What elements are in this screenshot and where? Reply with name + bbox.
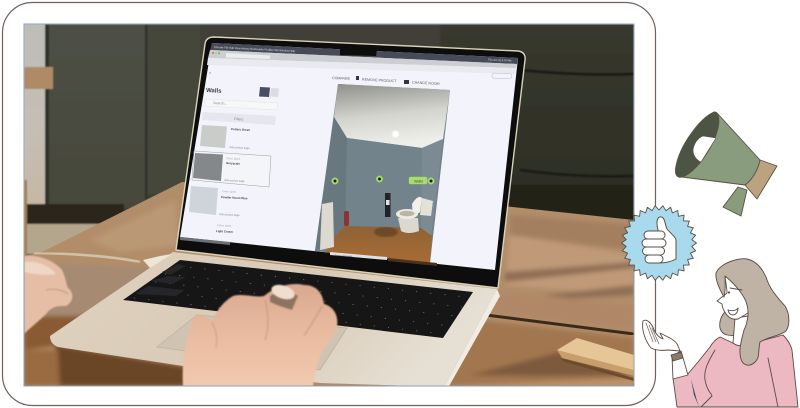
colour label: Colour Spark — [226, 157, 241, 161]
walls tag text: Walls — [414, 180, 423, 184]
mac menu bar — [210, 43, 518, 64]
selected card — [192, 151, 271, 187]
photo: person using laptop — [24, 24, 634, 388]
bottom strip pieces — [180, 237, 230, 245]
hotspot markers — [332, 176, 434, 184]
icon: thumbs-up badge — [622, 206, 696, 280]
thumb and palm — [657, 217, 676, 263]
laptop cable — [34, 253, 140, 262]
megaphone grip — [745, 160, 777, 199]
keyboard — [123, 260, 473, 338]
search box — [204, 99, 278, 110]
hair — [716, 259, 789, 365]
search text: Search... — [213, 101, 228, 106]
icon: megaphone — [675, 112, 777, 216]
toolbar icons — [356, 76, 409, 84]
close icon: × — [209, 70, 212, 75]
product name: Powder Room Blue — [221, 195, 248, 200]
camera notch — [340, 47, 377, 56]
shelf unit — [320, 202, 334, 250]
wood streaks — [24, 200, 634, 386]
walls heading: Walls — [206, 88, 222, 95]
badge starburst — [622, 206, 696, 280]
view toggle — [259, 87, 270, 97]
toolbar labels: COMPARE — [332, 76, 351, 81]
toilet — [396, 197, 433, 233]
laptop — [50, 37, 525, 388]
dark inner panel — [691, 379, 699, 407]
sweater — [673, 335, 798, 407]
laptop screen — [180, 43, 518, 270]
filters button — [202, 112, 276, 125]
watch band — [671, 352, 683, 361]
dispenser label — [386, 200, 390, 205]
floor — [326, 226, 432, 263]
mouth — [728, 308, 738, 315]
swatch: powder room blue — [189, 186, 218, 215]
colour label: Colour Spark — [222, 190, 237, 194]
trackpad — [157, 315, 347, 370]
megaphone opening — [675, 112, 719, 177]
colour label: Colour Spark — [217, 224, 232, 228]
megaphone lower handle — [723, 187, 747, 216]
megaphone inner — [693, 136, 716, 162]
brown dock bar — [388, 258, 437, 266]
browser tab strip — [208, 50, 517, 68]
right hand — [183, 282, 337, 388]
laptop base — [50, 252, 500, 388]
fire extinguisher — [344, 211, 349, 226]
photo border — [24, 24, 634, 386]
browser traffic lights — [212, 52, 220, 54]
remove product label: REMOVE PRODUCT — [362, 78, 397, 83]
ceiling — [334, 84, 450, 148]
brow — [730, 288, 742, 290]
product link: Visit product page — [224, 178, 245, 183]
table plank seam — [486, 315, 634, 334]
caption text: Tap to move walls — [335, 254, 353, 258]
product name: Light Cream — [216, 229, 233, 234]
update button — [492, 73, 512, 79]
wall dispenser — [385, 193, 390, 217]
forearm — [672, 351, 688, 379]
left hand — [24, 256, 72, 334]
filters text: Filters — [234, 117, 244, 121]
product name: Greyscale — [226, 161, 240, 166]
product name: Pottery Green — [231, 127, 250, 132]
room preview — [315, 84, 450, 263]
finger lines — [646, 323, 659, 344]
browser tab — [226, 53, 270, 59]
back wall — [345, 138, 422, 229]
sweater fold — [701, 350, 778, 407]
laptop lid — [176, 37, 525, 288]
menu text: Chrome File Edit View History Bookmarks Profiles Tab Window Help — [214, 45, 296, 53]
eye — [728, 291, 730, 294]
ceiling light — [392, 130, 399, 138]
right wall — [421, 139, 443, 236]
left wall — [315, 117, 347, 251]
illustration: woman presenting — [643, 259, 798, 407]
menu status text: Thu Jun 22 3:07 PM — [488, 58, 511, 63]
hand — [643, 320, 680, 351]
hotspot centres — [334, 178, 432, 182]
wooden table — [24, 182, 634, 386]
megaphone cone — [682, 113, 760, 185]
swatch: pottery green — [200, 125, 227, 148]
back hair — [720, 312, 745, 335]
floor stain — [374, 227, 398, 237]
wooden block — [557, 338, 634, 381]
swatch: greyscale — [193, 153, 223, 181]
address bar — [207, 58, 516, 74]
product link: Visit product page — [219, 212, 240, 217]
change room label: CHANGE ROOM — [412, 81, 440, 86]
background: wall and cabinets — [24, 24, 634, 264]
product link: Visit product page — [229, 145, 250, 150]
caption bar — [330, 252, 387, 260]
face — [717, 277, 750, 319]
neck — [733, 316, 748, 346]
fingers — [642, 231, 666, 263]
